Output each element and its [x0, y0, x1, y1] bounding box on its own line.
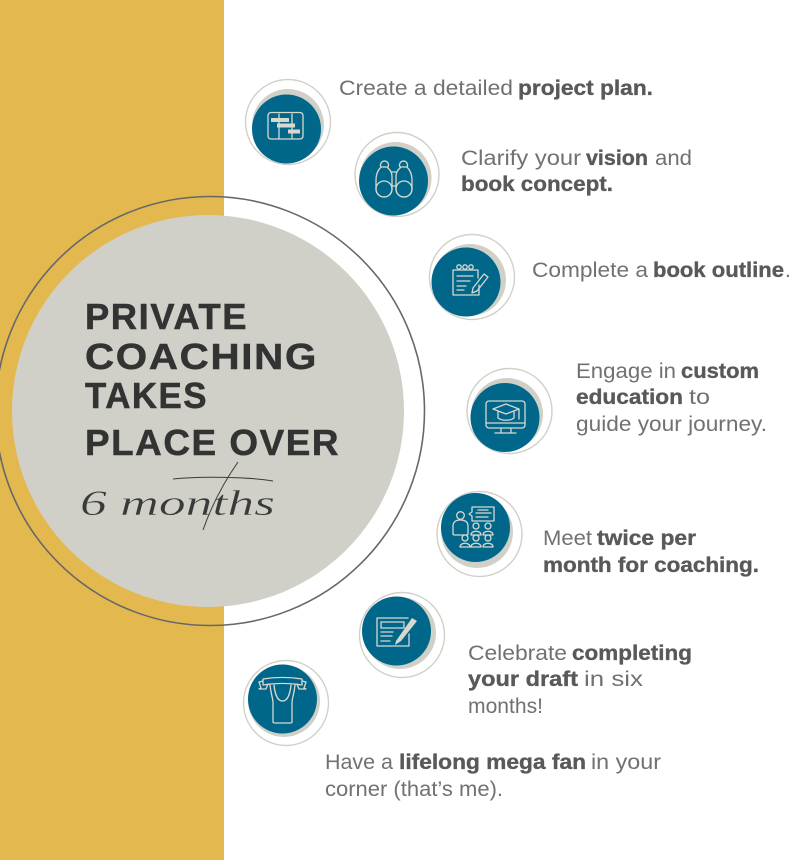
text: mega fan: in your — [591, 751, 661, 774]
title: TAKES — [85, 375, 208, 416]
icon: document and pen — [360, 592, 444, 678]
text: coaching: month for coaching. — [543, 554, 759, 577]
text: draft — [468, 642, 692, 718]
text: draft: Celebrate — [468, 642, 567, 665]
handwritten subtitle — [80, 462, 275, 530]
icon: gantt chart — [246, 80, 330, 164]
title — [85, 296, 340, 463]
text: vision: and — [655, 147, 692, 170]
text: coaching: Meet — [543, 527, 592, 550]
text: draft: months! — [468, 695, 543, 718]
text: vision: vision — [586, 147, 648, 170]
step 5: coaching — [437, 492, 759, 577]
text: education: to — [689, 386, 710, 409]
step 7: mega fan — [244, 660, 661, 801]
text: outline: Complete a — [532, 259, 648, 282]
step 3: outline — [430, 234, 791, 320]
icon: monitor with graduation cap — [467, 368, 552, 454]
title: PRIVATE — [85, 296, 248, 337]
text: mega fan: corner (that’s me). — [325, 778, 503, 801]
text: education — [576, 360, 767, 436]
central circle — [0, 196, 424, 626]
text: vision — [461, 147, 692, 196]
text: coaching: twice per — [597, 527, 696, 550]
step 1: project plan — [246, 77, 653, 164]
text: education: guide your journey. — [576, 413, 767, 436]
icon: fan shirt — [244, 660, 328, 746]
icon: binoculars — [355, 132, 439, 216]
text: outline: . — [785, 259, 791, 282]
title: COACHING — [85, 336, 318, 377]
text: mega fan: lifelong mega fan — [399, 751, 586, 774]
title: PLACE OVER — [85, 422, 340, 463]
text: project plan: Create a detailed — [339, 77, 513, 100]
text: education: education — [576, 386, 683, 409]
text: outline: book outline — [653, 259, 784, 282]
step 2: vision — [355, 132, 692, 216]
text: draft: in six — [584, 668, 644, 691]
yellow side panel — [0, 0, 224, 860]
text: mega fan — [325, 751, 661, 801]
text: draft: completing — [572, 642, 692, 665]
text: education: Engage in — [576, 360, 676, 383]
text: education: custom — [681, 360, 759, 383]
step 4: education — [467, 360, 767, 454]
text: coaching — [543, 527, 759, 577]
text: vision: book concept. — [461, 173, 613, 196]
text: vision: Clarify your — [461, 147, 581, 170]
text: draft: your draft — [468, 668, 578, 691]
text: outline — [532, 259, 791, 282]
text: project plan: project plan. — [518, 77, 653, 100]
icon: presenter and audience — [437, 492, 522, 576]
text: mega fan: Have a — [325, 751, 393, 774]
text: project plan — [339, 77, 653, 100]
handwritten subtitle: 6 months — [80, 483, 275, 523]
icon: notepad and pencil — [430, 234, 514, 320]
step 6: draft — [360, 592, 692, 718]
